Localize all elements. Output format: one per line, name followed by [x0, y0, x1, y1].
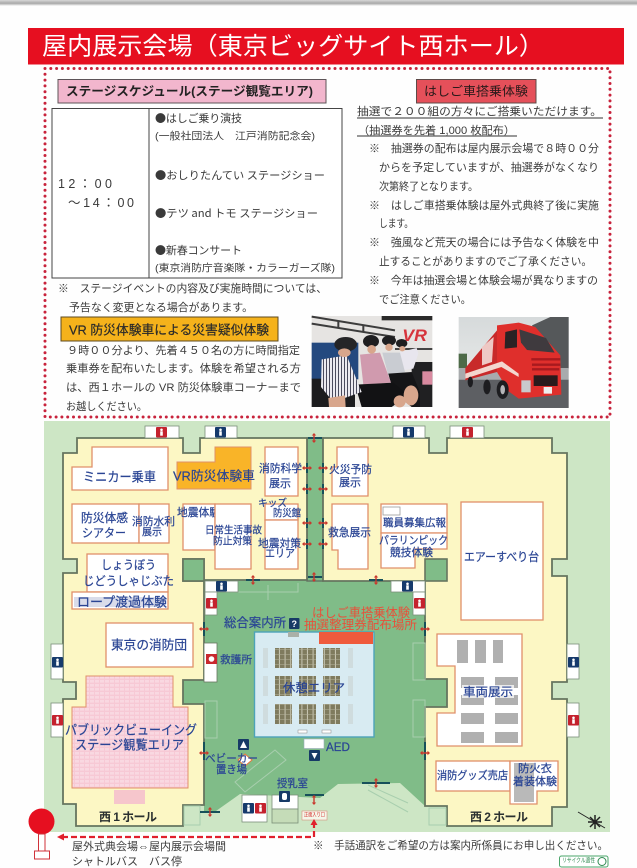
room: fire prevention: 火災予防 — [329, 462, 372, 476]
room: emergency exhibit: 救急展示 — [328, 525, 371, 539]
stage note — [58, 281, 327, 314]
icon: bus stop — [28, 808, 54, 859]
map background — [44, 421, 610, 832]
room: daily accident prevention — [205, 504, 262, 569]
nursing room — [272, 776, 308, 823]
public viewing stage area: ステージ観覧エリア — [75, 738, 184, 752]
floor map — [44, 421, 610, 832]
dashed route arrow to bus stop — [57, 819, 318, 840]
room: earthquake measures: 地震対策 — [258, 536, 301, 550]
room: firefighter suit: 着装体験 — [513, 774, 557, 788]
recycle badge — [560, 856, 608, 867]
room: water supply — [132, 504, 175, 543]
shuttle bus caption: シャトルバス バス停 — [72, 855, 182, 868]
room: VR truck area: VR防災体験車 — [173, 468, 255, 484]
hall name: west 1: 西 1 ホール — [99, 810, 157, 824]
ladder truck text: からを予定していますが、抽選券がなくなり — [379, 160, 599, 174]
AED — [304, 739, 350, 761]
photo: red VR truck — [459, 317, 569, 408]
heading: ladder truck ride — [416, 80, 536, 103]
ladder truck text: ※ はしご車搭乗体験は屋外式典終了後に実施 — [369, 198, 599, 212]
ladder truck text: ※ 今年は抽選会場と体験会場が異なりますの — [369, 273, 598, 287]
ladder truck text — [357, 104, 603, 306]
stage schedule table: ●テツ and トモ ステージショー — [155, 205, 318, 221]
VR text block: は、西１ホールの VR 防災体験車コーナーまで — [66, 380, 301, 394]
west notch courtyard square — [183, 559, 204, 581]
stage schedule table — [52, 108, 342, 278]
room: fire science — [259, 447, 302, 496]
room: kids: キッズ — [258, 496, 287, 510]
central courtyard — [183, 580, 447, 812]
room: vehicle display: 車両展示 — [463, 685, 513, 699]
heading: stage schedule: ステージスケジュール(ステージ観覧エリア) — [66, 84, 313, 98]
stroller parking: 置き場 — [216, 763, 247, 776]
ladder truck text: します。 — [379, 217, 413, 230]
lottery ticket label — [304, 605, 417, 632]
room: kids: 防災館 — [273, 506, 301, 520]
room: earthquake measures — [258, 520, 301, 569]
stage schedule table: (東京消防庁音楽隊・カラーガーズ隊) — [155, 262, 335, 274]
public viewing stage area — [65, 676, 197, 804]
info label: 総合案内所 — [224, 615, 286, 630]
first aid: 救護所 — [220, 653, 253, 666]
compass icon — [578, 812, 605, 829]
ladder truck text: ※ 強風など荒天の場合には予告なく体験を中 — [369, 235, 599, 249]
VR text block: お越しください。 — [66, 399, 147, 413]
VR text block: 乗車券を配布いたします。体験を希望される方 — [66, 361, 301, 375]
room: paralympics: パラリンピック — [379, 534, 448, 547]
VR text block — [66, 343, 301, 413]
info label — [224, 615, 300, 637]
doors and door arrows — [199, 433, 430, 817]
panel: events dotted frame — [45, 68, 610, 417]
pale structures in courtyard — [184, 583, 446, 825]
room: earthquake measures: エリア — [265, 548, 295, 560]
room: vehicle display — [437, 634, 522, 746]
room: fire engine picture play: じどうしゃじぶた — [83, 574, 174, 588]
central corridor — [307, 438, 323, 581]
room: air slide — [461, 502, 543, 620]
room: mini car: ミニカー乗車 — [83, 470, 156, 484]
room: firefighter suit: 防火衣 — [518, 761, 552, 775]
first aid — [204, 643, 253, 682]
room: earthquake experience — [177, 504, 220, 550]
room: disaster theater: シアター — [82, 526, 126, 540]
heading: VR disaster simulation — [61, 317, 278, 341]
room: water supply: 消防水利 — [132, 514, 175, 528]
recycle badge: リサイクル適性 — [562, 856, 595, 864]
room: kids — [258, 496, 301, 520]
room: fire science: 消防科学 — [259, 461, 302, 475]
stage note: 予告なく変更となる場合があります。 — [69, 300, 253, 314]
stage schedule table: (一般社団法人 江戸消防記念会) — [155, 130, 315, 142]
lottery ticket label: はしご車搭乗体験 — [312, 605, 410, 620]
VR text block: ９時００分より、先着４５０名の方に時間指定 — [67, 343, 300, 357]
east notch courtyard square — [425, 559, 447, 581]
heading: stage schedule — [58, 80, 326, 103]
room: paralympics — [379, 533, 448, 568]
main entrance label — [302, 811, 327, 820]
rest area — [254, 632, 374, 737]
stage schedule table: 12：00 — [58, 177, 112, 191]
main entrance label: 正面入り口 — [304, 812, 325, 818]
room: daily accident prevention: 防止対策 — [213, 534, 252, 548]
room: emergency exhibit — [328, 504, 371, 569]
room: fire engine picture play — [83, 554, 174, 592]
room: goods shop: 消防グッズ売店 — [437, 768, 508, 782]
title banner: 屋内展示会場（東京ビッグサイト西ホール） — [42, 32, 544, 60]
room: fire prevention: 展示 — [339, 476, 361, 489]
rest area: 休憩エリア — [283, 680, 345, 695]
room: mini car — [72, 447, 168, 490]
room: earthquake experience: 地震体験 — [177, 505, 220, 519]
room: Tokyo fire corps — [106, 623, 193, 667]
public viewing stage area: パブリックビューイング — [65, 722, 197, 738]
stage schedule table: ●はしご乗り演技 — [155, 110, 242, 126]
room: VR truck area — [173, 447, 255, 489]
stage schedule table: ●新春コンサート — [155, 242, 242, 258]
shuttle bus caption: 屋外式典会場⇔屋内展示会場間 — [72, 839, 226, 853]
room: Tokyo fire corps: 東京の消防団 — [111, 638, 187, 652]
ladder truck text: 抽選で２００組の方々にご搭乗いただけます。 — [357, 104, 602, 118]
info label: ? — [292, 619, 297, 629]
AED: AED — [326, 740, 350, 754]
lottery ticket label: 抽選整理券配布場所 — [304, 617, 417, 632]
room: air slide: エアーすべり台 — [464, 549, 539, 564]
room: staff recruiting — [381, 504, 447, 533]
photo: VR experience riders: VR — [402, 326, 427, 345]
room: fire prevention — [329, 447, 372, 496]
shuttle bus caption — [72, 839, 226, 868]
stroller parking: ベビーカー — [205, 752, 258, 765]
restrooms — [51, 426, 579, 822]
photo: VR experience riders — [312, 316, 432, 407]
ladder truck text: 次第終了となります。 — [379, 179, 478, 193]
room: water supply: 展示 — [142, 526, 162, 538]
room: goods shop — [436, 761, 510, 791]
ladder truck text: 止することがありますのでご了承ください。 — [379, 254, 592, 268]
room: disaster theater — [72, 504, 139, 543]
room: staff recruiting: 職員募集広報 — [383, 516, 446, 529]
ladder truck text: でご注意ください。 — [379, 292, 471, 306]
room: fire science: 展示 — [269, 477, 291, 490]
stage note: ※ ステージイベントの内容及び実施時間については、 — [58, 281, 327, 295]
heading: ladder truck ride: はしご車搭乗体験 — [424, 84, 529, 98]
heading: VR disaster simulation: VR 防災体験車による災害疑似体験 — [69, 322, 269, 338]
ladder truck text: ※ 抽選券の配布は屋内展示会場で８時００分 — [369, 141, 599, 155]
room: fire engine picture play: しょうぼう — [101, 558, 156, 572]
east hall 2 outline — [323, 438, 567, 826]
hall name: west 2: 西 2 ホール — [470, 810, 528, 824]
title banner — [28, 28, 624, 64]
sign language note: ※ 手話通訳をご希望の方は案内所係員にお申し出ください。 — [313, 838, 608, 852]
nursing room: 授乳室 — [277, 776, 308, 790]
ladder truck text: （抽選券を先着 1,000 枚配布） — [358, 123, 515, 137]
stage schedule table: ●おしりたんてい ステージショー — [155, 167, 325, 183]
stroller parking — [205, 739, 258, 776]
room: firefighter suit — [510, 761, 558, 804]
room: disaster theater: 防災体感 — [81, 510, 128, 525]
west hall 1 outline — [63, 438, 307, 826]
stage schedule table: ～14：00 — [68, 196, 134, 210]
room: paralympics: 競技体験 — [390, 545, 433, 559]
room: rope crossing: ロープ渡過体験 — [77, 594, 167, 610]
room: daily accident prevention: 日常生活事故 — [205, 524, 262, 536]
